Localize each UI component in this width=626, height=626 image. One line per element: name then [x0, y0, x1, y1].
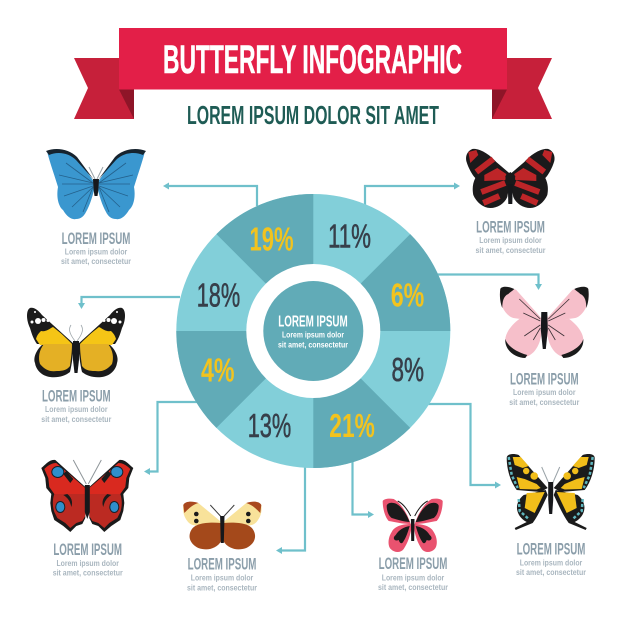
label: red and black — [476, 217, 546, 255]
label: swallowtail — [516, 539, 586, 577]
arrow: 8% to swallowtail butterfly — [428, 404, 501, 488]
value: 19%: 19% — [250, 221, 294, 258]
butterfly: peacock — [41, 460, 133, 532]
label: pink: sit amet, consectetur — [509, 398, 579, 407]
label: blue — [61, 229, 131, 266]
arrow: 21% to pink and black butterfly — [352, 462, 374, 518]
value: 4%: 4% — [201, 352, 234, 389]
butterfly: cream and brown moth — [183, 502, 262, 549]
arrow: 6% to pink butterfly — [436, 274, 542, 290]
value: 11%: 11% — [328, 217, 371, 254]
banner ribbon — [74, 28, 552, 119]
label: peacock: sit amet, consectetur — [53, 569, 123, 578]
label: yellow and black: sit amet, consectetur — [41, 415, 111, 424]
subtitle: LOREM IPSUM DOLOR SIT AMET — [187, 100, 439, 130]
label: blue: sit amet, consectetur — [61, 257, 131, 266]
arrow: 13% to moth — [276, 466, 305, 554]
value: 13%: 13% — [248, 407, 291, 444]
label: moth: Lorem ipsum dolor — [191, 574, 253, 583]
label: peacock — [53, 540, 123, 578]
arrow: 18% to yellow butterfly — [78, 297, 180, 309]
label: moth: LOREM IPSUM — [188, 554, 256, 573]
value: 21%: 21% — [329, 407, 375, 444]
label: peacock: LOREM IPSUM — [53, 540, 122, 559]
butterfly: pink — [500, 287, 589, 358]
label: pink and black: LOREM IPSUM — [379, 554, 447, 573]
arrow: 4% to peacock butterfly — [144, 402, 198, 475]
label: swallowtail: sit amet, consectetur — [516, 568, 586, 577]
label: swallowtail: Lorem ipsum dolor — [520, 559, 582, 568]
label: yellow and black — [41, 387, 111, 424]
label: pink and black: sit amet, consectetur — [378, 583, 448, 592]
butterfly: yellow and black — [27, 308, 125, 377]
butterfly: swallowtail — [507, 454, 595, 530]
butterfly: red and black — [466, 149, 555, 208]
centre text: Lorem ipsum dolor — [282, 330, 344, 340]
centre text: LOREM IPSUM — [278, 314, 348, 331]
label: moth: sit amet, consectetur — [187, 583, 257, 592]
label: peacock: Lorem ipsum dolor — [56, 559, 119, 568]
label: moth — [187, 554, 257, 592]
centre text: sit amet, consectetur — [278, 340, 348, 349]
arrow: 11% to red butterfly — [365, 182, 460, 206]
centre text — [278, 314, 348, 349]
label: blue: LOREM IPSUM — [62, 229, 130, 248]
butterfly: pink and black — [383, 499, 443, 552]
label: blue: Lorem ipsum dolor — [65, 248, 127, 256]
value: 6%: 6% — [391, 277, 424, 314]
label: red and black: sit amet, consectetur — [476, 246, 546, 255]
value: 18%: 18% — [197, 277, 240, 314]
label: yellow and black: LOREM IPSUM — [42, 387, 111, 406]
label: red and black: Lorem ipsum dolor — [479, 236, 542, 245]
label: red and black: LOREM IPSUM — [476, 217, 545, 236]
label: pink — [509, 369, 579, 407]
label: yellow and black: Lorem ipsum dolor — [45, 405, 108, 414]
label: pink and black: Lorem ipsum dolor — [382, 574, 444, 583]
arrow: 19% to blue butterfly — [163, 182, 257, 206]
donut chart — [176, 194, 450, 468]
value: 8%: 8% — [392, 351, 424, 388]
butterfly: blue — [46, 149, 146, 219]
label: pink: Lorem ipsum dolor — [513, 388, 576, 397]
label: pink and black — [378, 554, 448, 592]
